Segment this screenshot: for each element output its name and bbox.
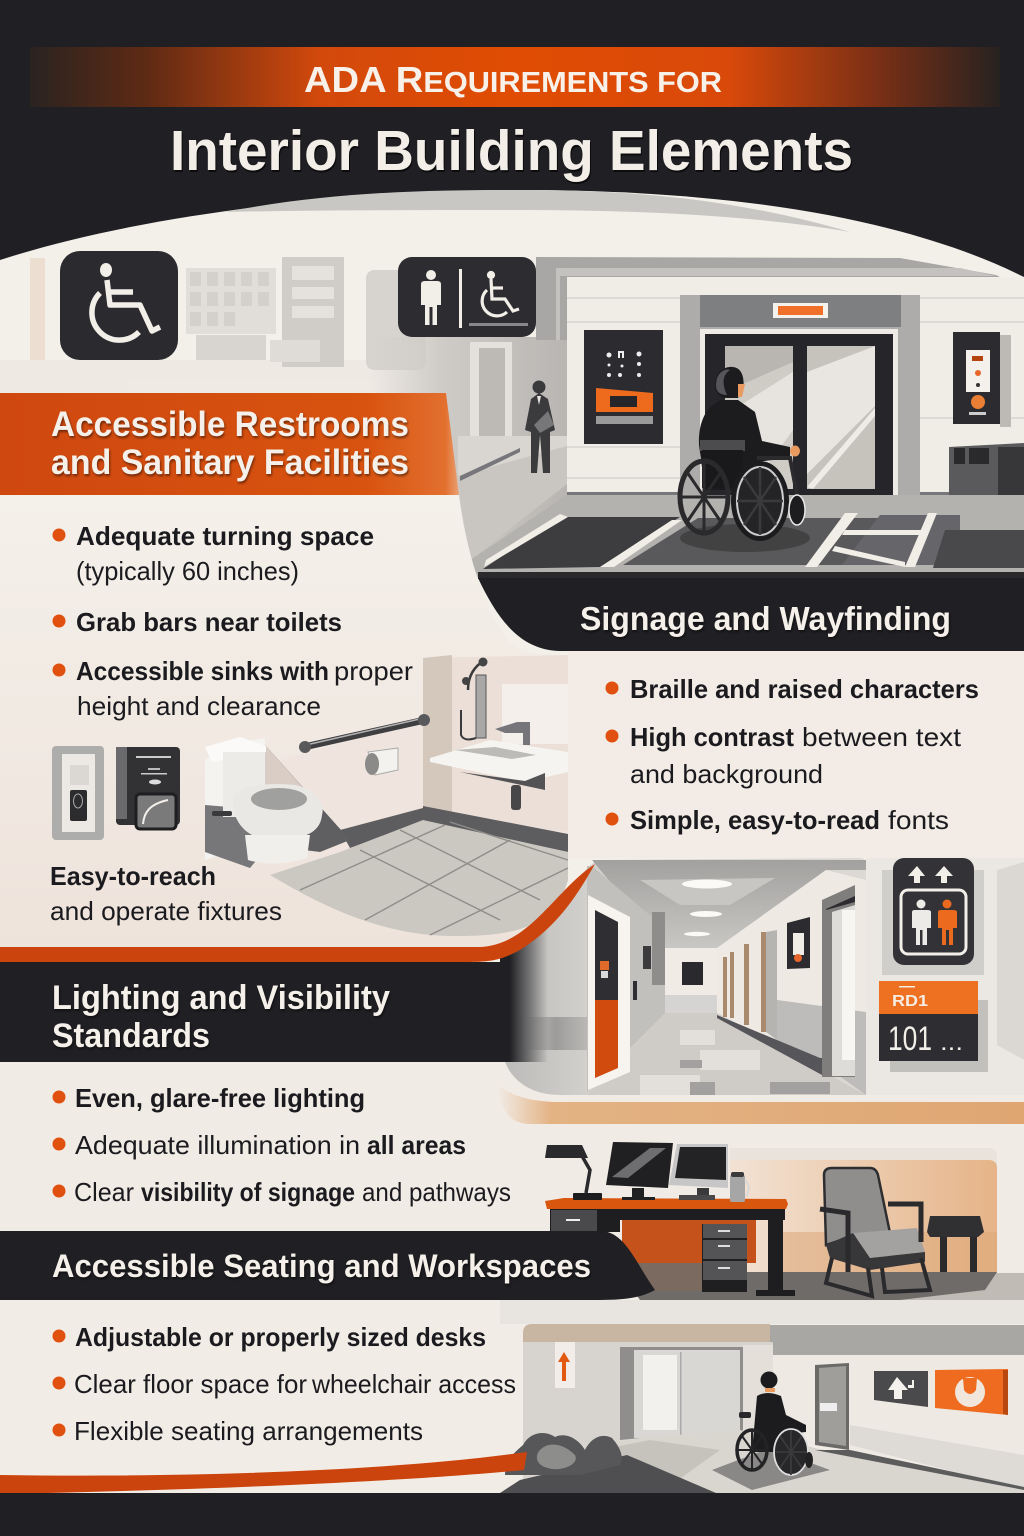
bullet: visibility: visibility of signage <box>141 1177 355 1207</box>
desk lamp <box>545 1145 602 1200</box>
coffee mug <box>730 1172 749 1202</box>
bullet: illumination <box>52 1130 466 1160</box>
orange directional sign <box>935 1369 1008 1415</box>
bullet: floor space: wheelchair access <box>311 1369 516 1399</box>
heading text: Lighting and Visibility <box>52 979 390 1017</box>
exit arrow sign <box>555 1342 575 1388</box>
heading text: Accessible Restrooms <box>51 405 409 444</box>
dark gradient joining heading band <box>500 905 548 1062</box>
header fascia <box>536 257 1024 340</box>
bullet: illumination: all areas <box>367 1130 466 1160</box>
bullet: high contrast: and background <box>630 759 823 789</box>
wall control panel sign <box>953 332 1011 427</box>
fixture: hand dryer <box>116 747 180 829</box>
pictogram: wheelchair badge <box>60 251 178 360</box>
heading text: and Sanitary Facilities <box>51 443 409 482</box>
background faded building scene <box>0 257 470 393</box>
person in wheelchair at door <box>680 367 810 552</box>
accent: orange swoosh <box>0 864 595 962</box>
list: restroom requirements <box>52 521 413 721</box>
list: seating requirements <box>52 1322 516 1446</box>
left wall <box>587 866 665 1092</box>
main title: Interior Building Elements <box>170 119 853 183</box>
right wall <box>773 1355 1024 1490</box>
bullet: flexible seating: Flexible seating arrangements <box>74 1416 423 1446</box>
heading band: signage and wayfinding: Signage and Wayfinding <box>580 600 951 637</box>
faded tower <box>196 257 426 370</box>
bullet: floor space: Clear floor space for <box>74 1369 307 1399</box>
panel: lighting list background <box>0 1062 1024 1300</box>
room number sign: ... <box>940 1029 963 1056</box>
bullet: glare free: Even, glare-free lighting <box>75 1083 365 1113</box>
heading text <box>51 405 409 482</box>
bullet: illumination: Adequate illumination in <box>75 1130 360 1160</box>
fixture: wall soap dispenser <box>52 746 104 840</box>
corridor left of entrance <box>370 337 567 560</box>
pictogram: restroom sign <box>398 257 536 337</box>
room number sign <box>879 981 978 1061</box>
illustration: accessible bathroom <box>205 655 568 936</box>
drawer stack <box>702 1224 747 1292</box>
corridor doors <box>723 932 766 1032</box>
heading text: Standards <box>52 1017 210 1055</box>
heading band: lighting and visibility <box>0 962 505 1062</box>
room number sign: 101 <box>888 1020 932 1058</box>
monitor small <box>669 1144 728 1200</box>
grab bar <box>299 714 430 753</box>
photo: accessible lobby <box>500 1324 1024 1493</box>
toilet paper <box>365 748 398 775</box>
accent: bottom orange stripe <box>0 1452 527 1494</box>
stool <box>927 1216 984 1272</box>
bullet: accessible sinks <box>52 656 413 721</box>
seated person <box>699 367 800 490</box>
orange door indicator <box>773 303 828 318</box>
heading band: accessible seating <box>0 1231 655 1300</box>
armchair <box>820 1168 930 1296</box>
floor <box>587 1013 866 1095</box>
photo: accessible entrance <box>370 257 1024 579</box>
bullet: accessible sinks: height and clearance <box>77 691 321 721</box>
standing person with bag <box>525 380 555 473</box>
bullet: visibility <box>52 1177 511 1207</box>
text: easy to reach fixtures: Easy-to-reach <box>50 861 216 891</box>
ribbon title: ADA REQUIREMENTS FOR <box>304 59 722 100</box>
bullet: grab bars: Grab bars near toilets <box>76 607 342 637</box>
gray lower wall strip <box>525 1017 587 1050</box>
end wall artwork <box>682 962 703 985</box>
floor tiles <box>270 820 568 936</box>
window panes <box>620 1347 743 1443</box>
person in wheelchair in lobby <box>737 1372 813 1475</box>
tile wall <box>423 655 568 838</box>
header ribbon <box>30 47 1000 107</box>
door frame <box>680 295 920 503</box>
heading text <box>52 979 390 1055</box>
bullet: high contrast <box>606 722 962 789</box>
accent: tan band <box>498 1085 1024 1124</box>
right wall <box>717 870 866 1095</box>
photo: hallway <box>500 858 990 1095</box>
monitor large <box>606 1142 673 1200</box>
entrance wall <box>567 277 1024 505</box>
bullet: accessible sinks: proper <box>334 656 413 686</box>
bottom dark footer <box>0 1493 1024 1536</box>
faded building with window grid <box>186 268 276 334</box>
heading band: signage and wayfinding <box>478 578 1024 651</box>
list: lighting requirements <box>52 1083 511 1207</box>
panel: signage list background <box>568 651 1024 858</box>
desk <box>545 1198 795 1296</box>
end wall <box>665 948 717 1013</box>
tan wall <box>730 1148 997 1273</box>
rocks and planter <box>505 1433 622 1475</box>
list: signage requirements <box>606 674 979 835</box>
glass doors <box>705 334 893 501</box>
floor <box>640 1273 1024 1310</box>
panel: restroom left cream body <box>0 495 568 947</box>
bullet: simple fonts: Simple, easy-to-read <box>630 805 880 835</box>
bullet: high contrast: between text <box>802 722 962 752</box>
waste bin <box>949 443 1024 527</box>
bullet: desks: Adjustable or properly sized desks <box>75 1322 486 1352</box>
entrance floor <box>470 495 1024 579</box>
left drawer <box>551 1210 597 1231</box>
corridor wall sign <box>787 917 810 969</box>
heading band: accessible seating: Accessible Seating and Workspaces <box>52 1248 591 1284</box>
hallway base <box>500 858 866 1095</box>
bullet: high contrast: High contrast <box>630 722 794 752</box>
bullet: turning space <box>52 521 374 586</box>
ceiling <box>592 860 990 948</box>
illustration: desk and chair <box>545 1142 1024 1310</box>
bullet: visibility: and pathways <box>362 1177 511 1207</box>
baseboard <box>717 1015 835 1075</box>
wheelchair <box>680 440 805 539</box>
braille sign panel <box>584 330 663 444</box>
orange figure <box>938 900 957 945</box>
lobby door <box>815 1363 849 1450</box>
shower hose <box>461 658 488 739</box>
panel: seating list background <box>0 1300 1024 1493</box>
elevator sign <box>893 858 974 965</box>
text: easy to reach fixtures <box>50 861 282 926</box>
bullet: turning space: Adequate turning space <box>76 521 374 551</box>
lobby floor <box>500 1430 1024 1493</box>
right doorway <box>822 885 855 1077</box>
text: easy to reach fixtures: and operate fixtures <box>50 896 282 926</box>
room number sign: RD1 <box>892 993 928 1010</box>
bullet: accessible sinks: Accessible sinks with <box>76 656 329 686</box>
bullet: visibility: Clear <box>74 1177 134 1207</box>
person icon <box>421 270 441 325</box>
panel: wayfinding signs beside hallway <box>866 858 1024 1095</box>
near door with orange panel <box>588 895 637 1090</box>
heading band: accessible restrooms <box>0 393 459 495</box>
wheelchair icon <box>482 272 519 316</box>
sink <box>430 722 568 810</box>
bullet: floor space <box>52 1369 516 1399</box>
toilet <box>205 737 350 868</box>
bullet: braille: Braille and raised characters <box>630 674 979 704</box>
arrow wayfinding sign <box>874 1371 928 1407</box>
white figure <box>912 900 931 945</box>
bullet: turning space: (typically 60 inches) <box>76 556 299 586</box>
bullet: simple fonts: fonts <box>888 805 949 835</box>
